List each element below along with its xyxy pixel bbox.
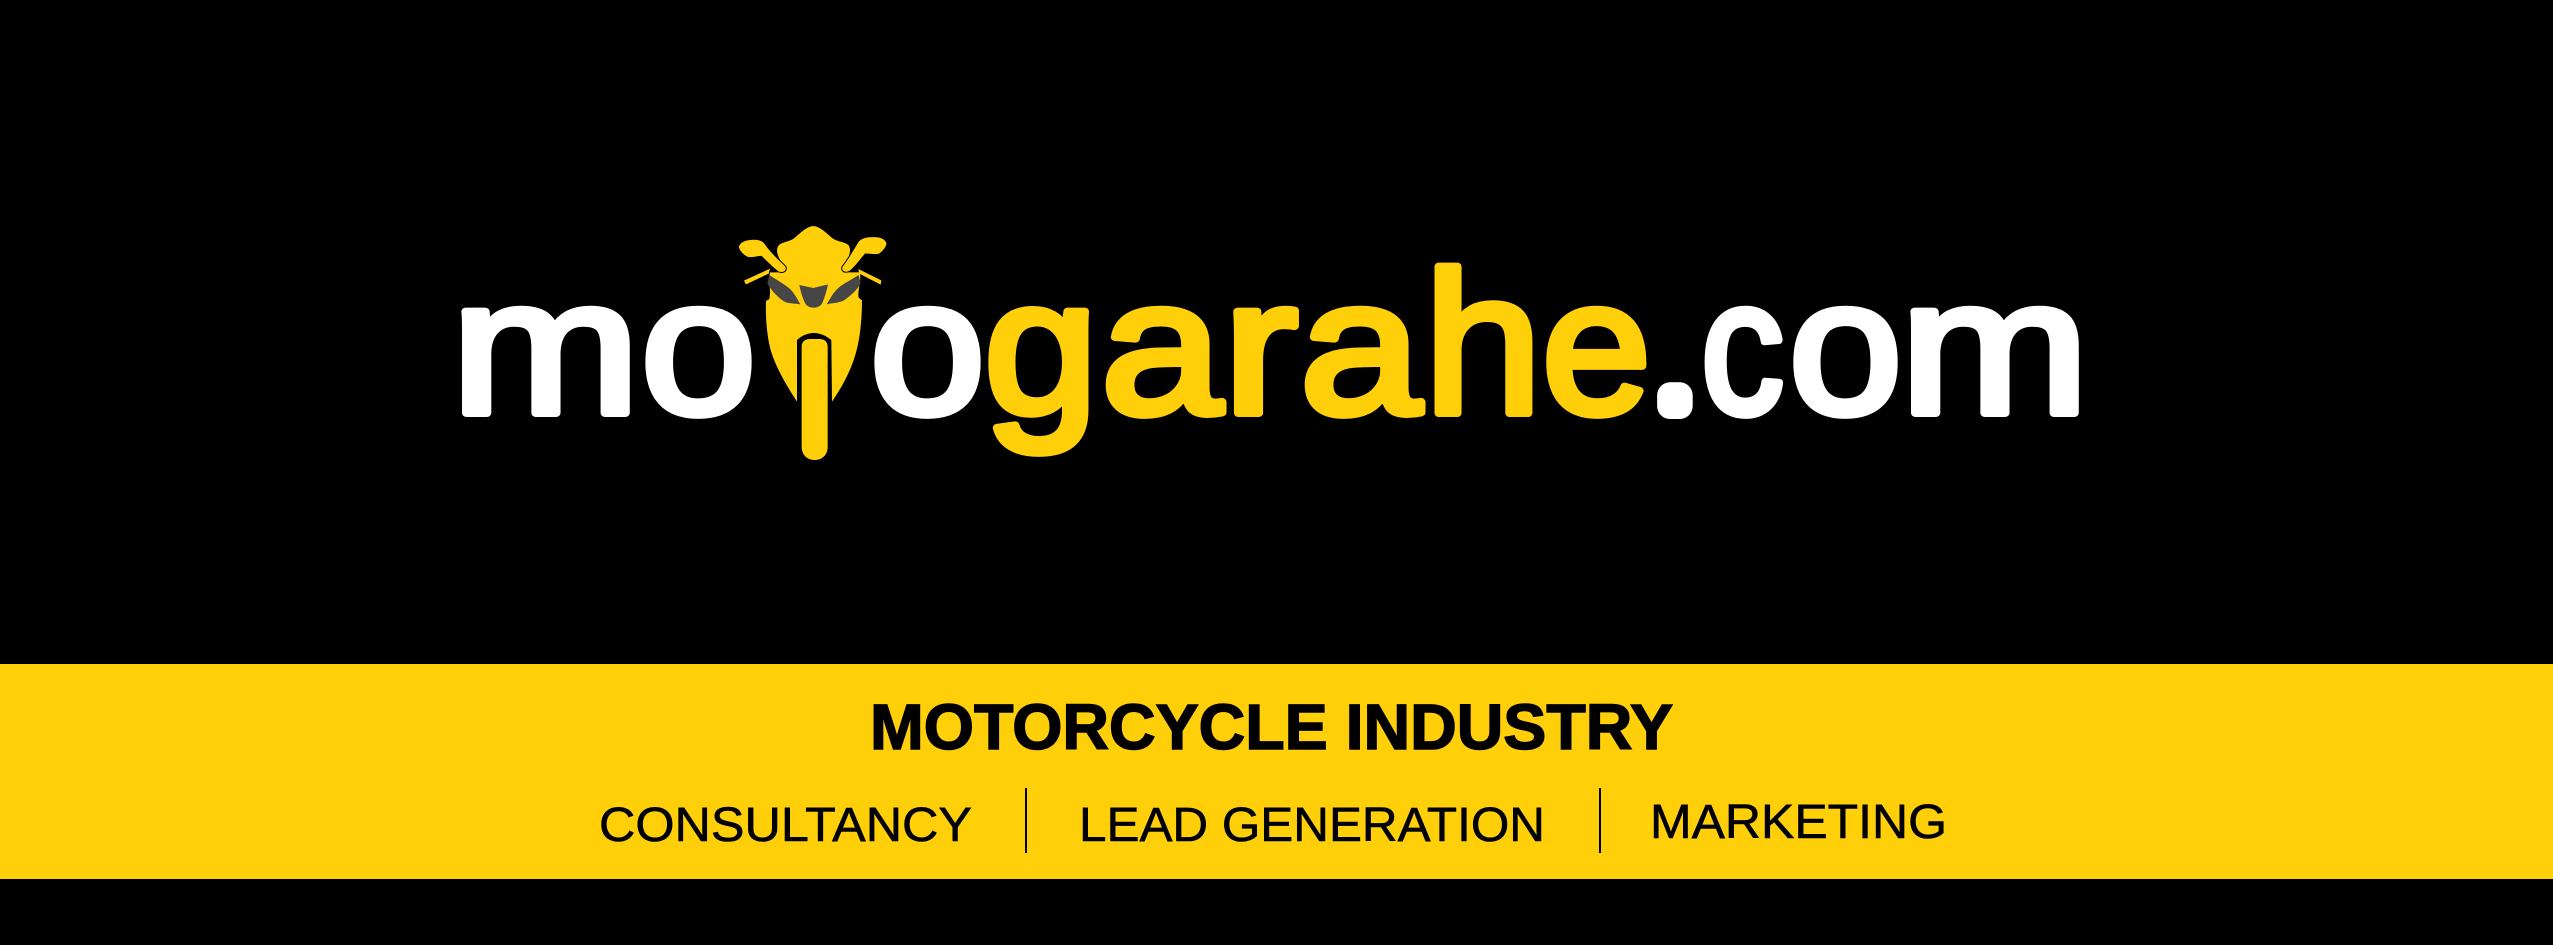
wordmark: garahe (yellow): r <box>1223 239 1298 454</box>
heading: motorcycle industry: MOTORCYCLE INDUSTRY <box>870 691 1673 763</box>
logo wordmark: motogarahe.com <box>451 226 2089 460</box>
center headlight <box>799 284 828 308</box>
wordmark: garahe (yellow): a <box>1101 239 1222 454</box>
service: marketing: MARKETING <box>1650 796 1947 849</box>
wordmark: .com (white) <box>1661 239 2089 454</box>
icon: front view motorcycle forming the letter t <box>738 226 887 460</box>
front wheel <box>802 339 828 460</box>
wordmark: .com (white): c <box>1701 239 1784 454</box>
right handlebar <box>858 269 881 285</box>
wordmark: mo (white): o <box>641 239 756 454</box>
wordmark: garahe (yellow) <box>984 230 1651 456</box>
wordmark: garahe (yellow): e <box>1542 239 1651 454</box>
service: lead generation: LEAD GENERATION <box>1079 799 1545 852</box>
right headlight <box>827 275 861 304</box>
wordmark: garahe (yellow): a <box>1300 239 1421 454</box>
wordmark: mo (white): m <box>451 239 640 454</box>
left headlight <box>767 275 800 304</box>
service: consultancy: CONSULTANCY <box>599 799 972 852</box>
wordmark: .com (white): . <box>1661 316 1689 428</box>
left mirror <box>738 239 786 272</box>
wordmark: .com (white): o <box>1789 239 1902 454</box>
panel: yellow services band <box>0 664 2553 879</box>
wordmark: mo (white) <box>451 239 756 454</box>
wordmark: .com (white): m <box>1900 239 2089 454</box>
wordmark: garahe (yellow): h <box>1424 230 1542 456</box>
left handlebar <box>744 269 770 284</box>
wordmark: garahe (yellow): g <box>984 239 1098 454</box>
right mirror <box>842 237 887 272</box>
wordmark: o (white): o <box>870 239 985 454</box>
